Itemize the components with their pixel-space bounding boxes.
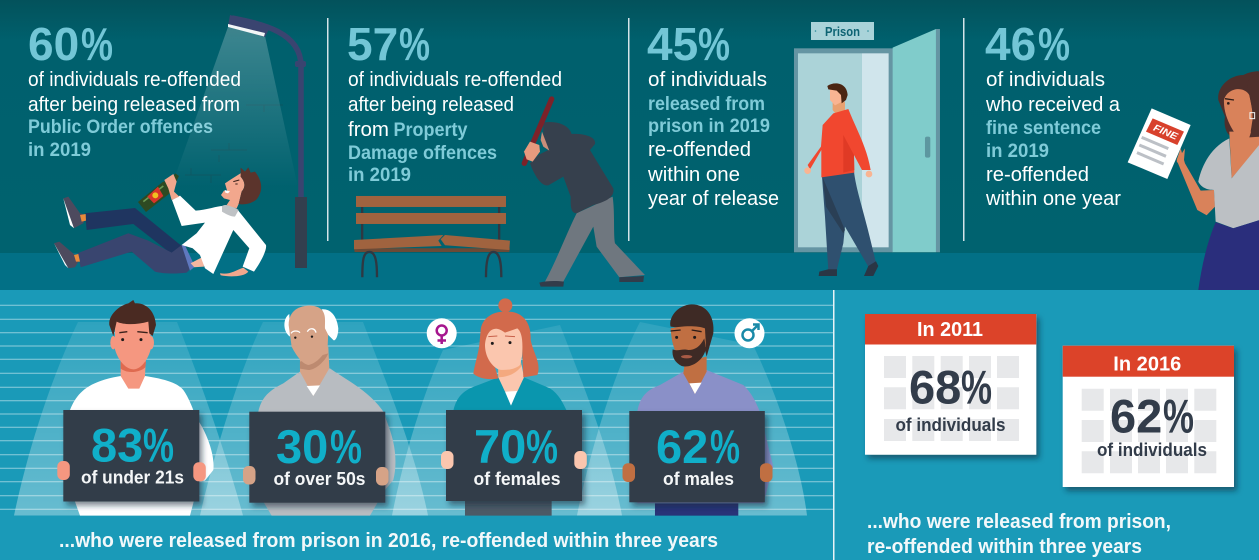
icon: street lamp (165, 15, 307, 268)
text block: property damage (348, 69, 562, 186)
calendar: 2016: In 2016 (1113, 353, 1181, 375)
calendar: 2011: of individuals (896, 415, 1006, 435)
text block: property damage: of individuals re-offended (348, 69, 562, 91)
text block: prison release: within one (647, 164, 740, 186)
text block: prison release: re-offended (648, 139, 751, 161)
text block: public order: Public Order offences (28, 117, 213, 138)
panel: fine sentence (985, 18, 1259, 290)
calendar: 2016: of individuals (1097, 440, 1207, 460)
illustration: man walking out (804, 83, 878, 276)
heading: 60%: % (81, 18, 113, 70)
top background scene (0, 0, 1259, 290)
illustration: woman with fine: FINE (1151, 123, 1180, 143)
calendar: 2011: In 2011 (917, 319, 983, 341)
sign: 70% of females: of females (474, 469, 560, 489)
sign: 70% of females: 70 (474, 420, 526, 473)
heading: 45%: % (698, 18, 730, 70)
text block: fine sentence: of individuals (986, 69, 1105, 91)
text block: public order: after being released from (28, 94, 240, 116)
sign: 83% of under 21s: 83 (91, 418, 143, 472)
person: older man (258, 306, 395, 516)
text block: property damage: from (348, 119, 389, 141)
text block: public order: of individuals re-offended (28, 69, 241, 91)
heading: 57%: 57 (347, 18, 398, 70)
heading: 46% (985, 18, 1070, 70)
text block: prison release: released from (648, 94, 765, 115)
background: lower section (0, 290, 1259, 560)
heading: 60% (28, 18, 113, 70)
sign: 62% of males (622, 411, 772, 502)
sign: 62% of males: % (710, 420, 740, 473)
heading: 46%: % (1038, 18, 1070, 70)
calendar: 2016: % (1163, 390, 1194, 443)
text block: prison release: year of release (648, 188, 779, 210)
illustration: broken bench (354, 196, 510, 277)
heading: 45% (647, 18, 730, 70)
caption: three years by year (867, 511, 1171, 558)
sign: Prison (811, 22, 874, 40)
sign: 70% of females: % (526, 420, 558, 473)
illustration: hooded man with bat (524, 99, 645, 287)
spotlights (14, 322, 807, 516)
text block: prison release: prison in 2019 (648, 116, 770, 137)
heading: 45%: 45 (647, 18, 698, 70)
illustration: woman with fine (1128, 71, 1259, 290)
sign: 30% of over 50s: of over 50s (274, 469, 366, 489)
sign: 30% of over 50s (243, 412, 388, 503)
icon: female symbol (427, 318, 457, 348)
illustration: prison door (794, 29, 940, 252)
person: man with beard (637, 304, 773, 516)
text block: prison release: of individuals (648, 69, 767, 91)
person: woman (453, 298, 567, 516)
sign: 30% of over 50s: % (330, 420, 362, 473)
heading: 60%: 60 (28, 18, 79, 70)
sign: 62% of males: 62 (656, 420, 708, 473)
text block: fine sentence: who received a (985, 94, 1121, 116)
sign: Prison: Prison (825, 25, 860, 39)
text block: fine sentence (985, 69, 1121, 210)
text block: property damage: in 2019 (348, 165, 411, 186)
text block: prison release (647, 69, 779, 210)
text block: fine sentence: within one year (985, 188, 1121, 210)
text block: property damage: after being released (348, 94, 514, 116)
person: young man (70, 300, 214, 516)
sign: 83% of under 21s: of under 21s (81, 468, 184, 488)
background lines (0, 305, 833, 509)
heading: 57%: % (399, 18, 430, 70)
heading: 46%: 46 (985, 18, 1036, 70)
calendar: 2011: 68 (909, 360, 961, 413)
calendar: 2016: 62 (1110, 390, 1162, 443)
calendar: 2011 (865, 314, 1036, 455)
text block: property damage: Damage offences (348, 143, 497, 164)
icon: male symbol (734, 318, 764, 348)
panel: public order offences (28, 15, 307, 276)
text block: property damage: Property (394, 120, 468, 141)
sign: 70% of females (441, 410, 587, 501)
text block: public order: in 2019 (28, 140, 91, 161)
sign: 83% of under 21s: % (143, 418, 174, 472)
panel: property damage offences (347, 18, 645, 287)
illustration: man falling with bottle (54, 167, 266, 276)
sign: 62% of males: of males (663, 469, 734, 489)
caption: three years by year: re-offended within three years (867, 536, 1142, 558)
text block: public order (28, 69, 241, 161)
text block: fine sentence: fine sentence (986, 118, 1101, 139)
text block: fine sentence: in 2019 (986, 141, 1049, 162)
caption: three years by demographic: ...who were released from prison in 2016, re-offended within three years (59, 530, 718, 552)
calendar: 2016 (1063, 346, 1234, 487)
sign: 83% of under 21s (57, 410, 206, 502)
caption: three years by year: ...who were released from prison, (867, 511, 1171, 533)
sign: 30% of over 50s: 30 (276, 420, 328, 473)
calendar: 2011: % (961, 360, 992, 413)
heading: 57% (347, 18, 430, 70)
panel: released from prison (647, 18, 940, 276)
text block: fine sentence: re-offended (986, 164, 1089, 186)
